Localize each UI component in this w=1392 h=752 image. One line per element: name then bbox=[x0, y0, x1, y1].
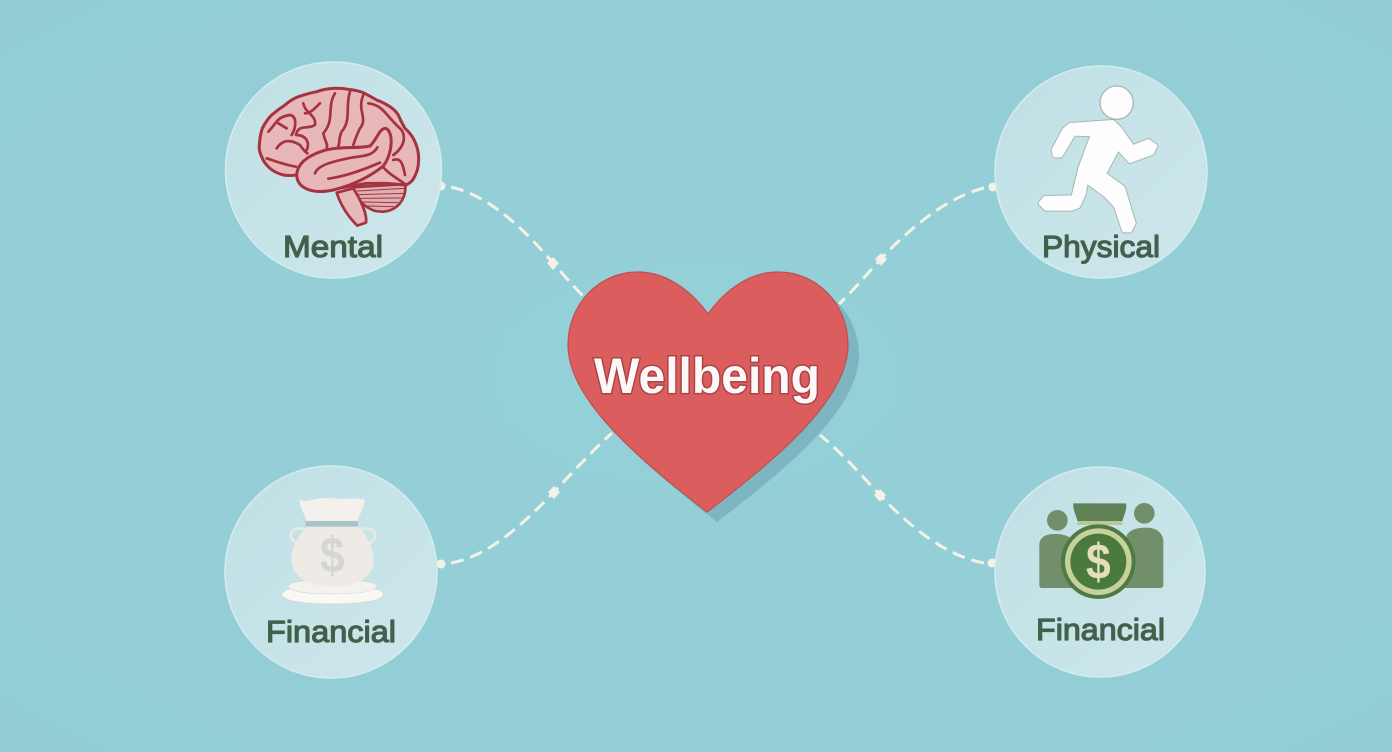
panel disc: financial left bbox=[225, 466, 437, 678]
label: Physical: Physical bbox=[1042, 229, 1160, 264]
panel: financial right bbox=[995, 467, 1205, 677]
icon: money bag bbox=[282, 498, 383, 604]
label: Financial: Financial bbox=[1036, 612, 1165, 647]
icon: people with money bag and coin bbox=[1039, 503, 1163, 599]
connector: financial left to heart bbox=[436, 433, 612, 568]
panel: mental bbox=[226, 62, 442, 278]
dollar sign: $ bbox=[1086, 534, 1111, 590]
heart shape bbox=[568, 272, 848, 512]
heart: wellbeing bbox=[568, 272, 859, 522]
panel: financial left bbox=[225, 466, 437, 678]
heart shadow bbox=[578, 282, 859, 522]
panel: physical bbox=[995, 66, 1207, 278]
label: Mental: Mental bbox=[283, 229, 383, 264]
panel disc: mental bbox=[226, 62, 442, 278]
label: Financial: Financial bbox=[266, 614, 396, 649]
dollar sign: $ bbox=[320, 527, 345, 583]
icon: running figure bbox=[1041, 86, 1155, 230]
connector: financial right to heart bbox=[820, 435, 996, 568]
panel disc: physical bbox=[995, 66, 1207, 278]
connector: mental to heart bbox=[436, 182, 585, 298]
panel disc: financial right bbox=[995, 467, 1205, 677]
icon: brain bbox=[259, 88, 419, 226]
connector: physical to heart bbox=[838, 182, 998, 305]
heading: Wellbeing: Wellbeing bbox=[594, 348, 820, 404]
